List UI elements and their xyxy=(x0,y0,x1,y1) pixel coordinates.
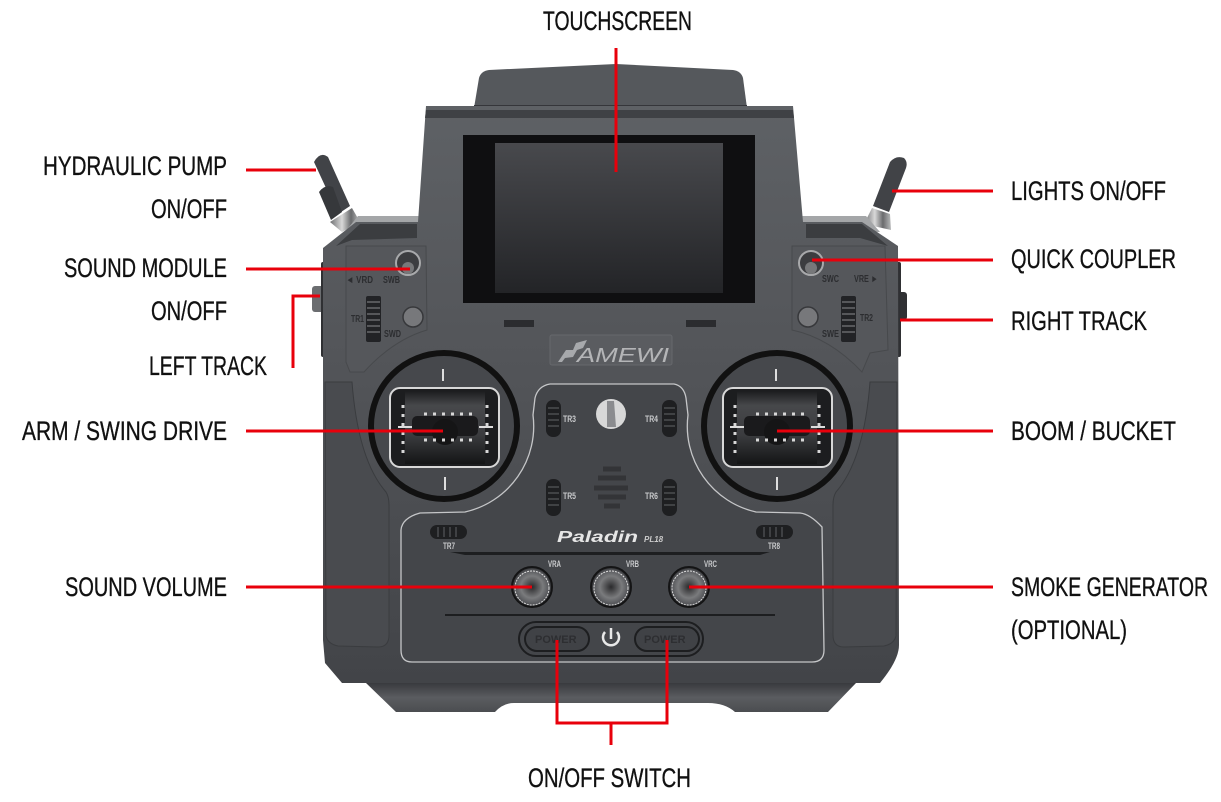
label: arm swing drive: ARM / SWING DRIVE xyxy=(22,416,227,446)
left switch panel xyxy=(346,246,427,372)
top band xyxy=(425,110,794,118)
label: left track: LEFT TRACK xyxy=(149,351,267,381)
base xyxy=(366,683,856,712)
right switch panel: SWE xyxy=(822,329,839,340)
label: on/off switch: ON/OFF SWITCH xyxy=(528,763,691,793)
label: sound module on/off: ON/OFF xyxy=(151,296,227,326)
label: hydraulic pump: HYDRAULIC PUMP xyxy=(43,151,227,181)
right antenna switch xyxy=(864,157,907,230)
shoulder caps xyxy=(345,216,424,232)
right switch panel: VRE ► xyxy=(854,274,878,285)
centre panel: TR5 xyxy=(563,491,576,501)
top handle xyxy=(474,64,747,108)
logo: AMEWI xyxy=(576,345,670,367)
right switch panel xyxy=(792,246,888,372)
centre switch xyxy=(596,399,626,429)
right switch panel: TR2 xyxy=(860,313,873,324)
side track sliders xyxy=(312,262,907,357)
centre panel: TR6 xyxy=(645,491,658,501)
logo xyxy=(550,335,672,367)
centre panel: POWER xyxy=(535,634,577,646)
power buttons xyxy=(519,622,703,656)
left switch panel: SWB xyxy=(383,275,400,286)
centre panel xyxy=(401,384,824,662)
callout lines xyxy=(246,48,993,745)
speaker xyxy=(594,469,628,506)
label: optional: (OPTIONAL) xyxy=(1011,615,1127,645)
side grips xyxy=(325,382,389,647)
left switch panel: ◄ VRD xyxy=(346,275,373,286)
right switch panel: SWC xyxy=(822,274,839,285)
centre panel: TR3 xyxy=(563,414,576,424)
label: boom bucket: BOOM / BUCKET xyxy=(1011,416,1176,446)
label: sound volume: SOUND VOLUME xyxy=(65,572,227,602)
main body xyxy=(323,106,899,683)
trims xyxy=(430,400,793,539)
label: sound module: SOUND MODULE xyxy=(64,253,227,283)
divider lines xyxy=(450,552,770,555)
label: lights: LIGHTS ON/OFF xyxy=(1011,176,1166,206)
left switch panel: SWD xyxy=(384,329,401,340)
controller xyxy=(312,64,907,712)
centre panel: TR7 xyxy=(443,541,455,551)
knobs xyxy=(512,567,709,607)
power icon xyxy=(603,628,619,645)
label: right track: RIGHT TRACK xyxy=(1011,306,1147,336)
screen xyxy=(463,135,755,303)
left antenna switches xyxy=(314,155,360,232)
centre panel: PL18 xyxy=(644,535,664,544)
centre panel: POWER xyxy=(644,634,686,646)
speaker slots xyxy=(504,320,716,327)
centre panel: TR8 xyxy=(768,541,780,551)
centre panel: VRB xyxy=(626,559,639,569)
centre panel: VRA xyxy=(548,559,561,569)
brand name: Paladin xyxy=(557,529,638,546)
label: hydraulic pump on/off: ON/OFF xyxy=(151,194,227,224)
shoulder bands xyxy=(336,224,417,246)
right gimbal xyxy=(704,353,850,499)
centre panel: VRC xyxy=(704,559,717,569)
left gimbal xyxy=(371,353,517,499)
left switch panel: TR1 xyxy=(351,314,364,325)
centre panel: TR4 xyxy=(645,414,658,424)
label: touchscreen: TOUCHSCREEN xyxy=(543,6,692,36)
